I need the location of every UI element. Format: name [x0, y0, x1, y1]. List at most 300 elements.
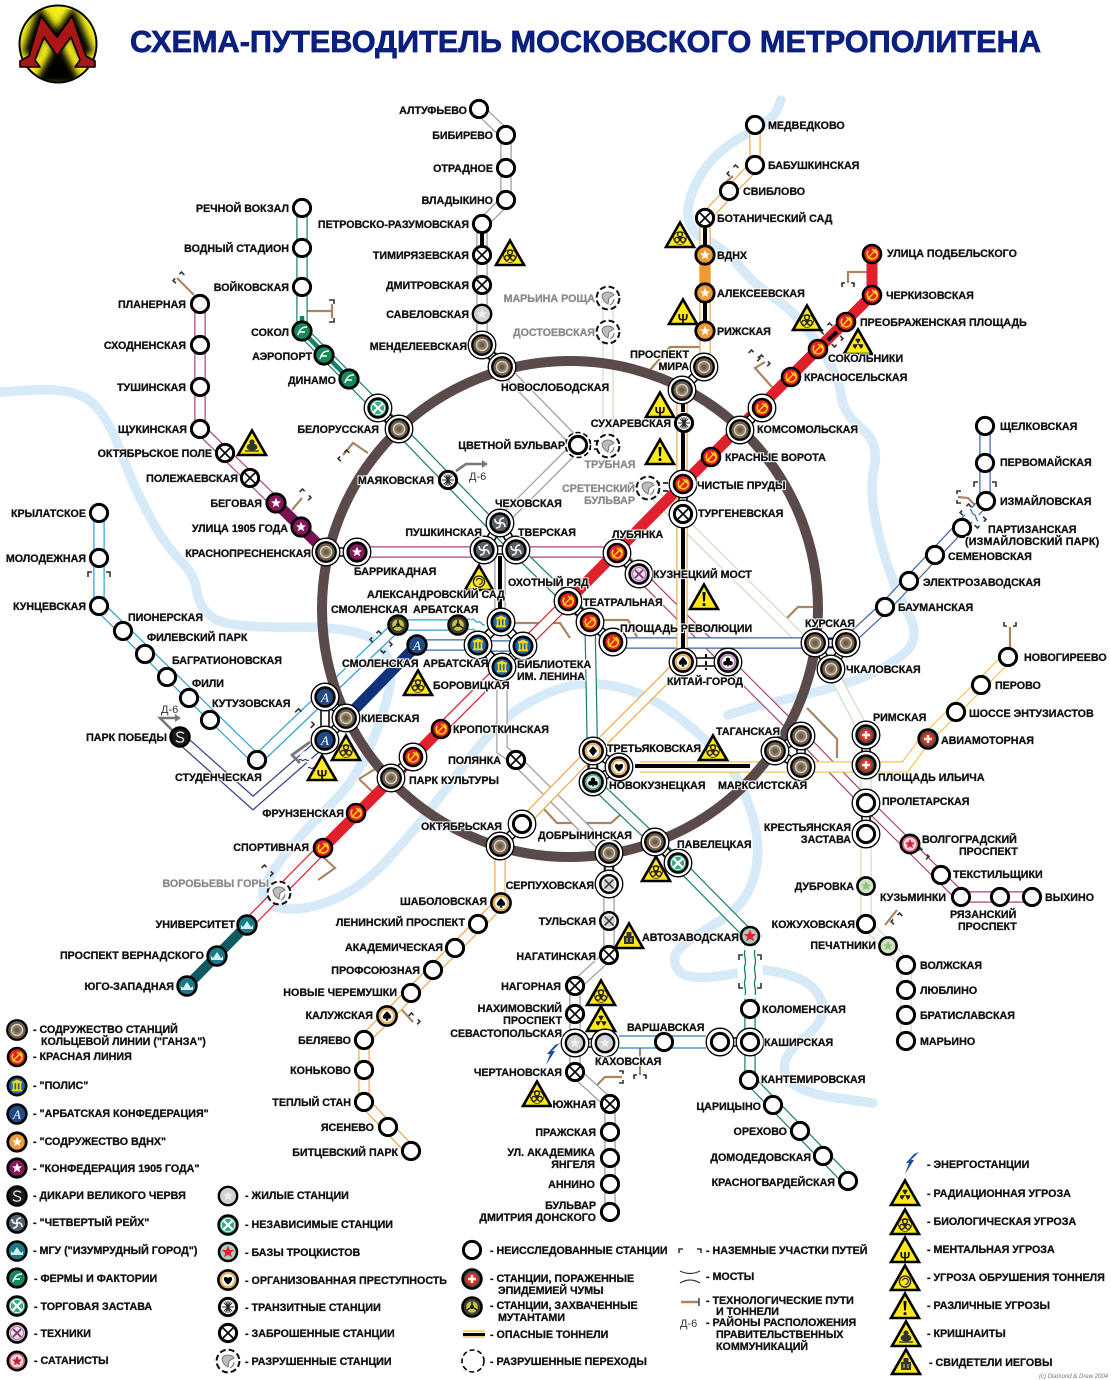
station: Филевский парк: ФИЛЕВСКИЙ ПАРК	[147, 631, 248, 644]
station: Волжская	[897, 956, 982, 974]
station: Полянка: ПОЛЯНКА	[448, 755, 501, 767]
station: ВДНХ: ВДНХ	[717, 250, 748, 262]
station: Площадь Ильича	[852, 751, 985, 784]
station: Лубянка	[603, 529, 663, 567]
legend item: Дикари: - ДИКАРИ ВЕЛИКОГО ЧЕРВЯ	[33, 1190, 186, 1202]
legend item: Содружество ВДНХ: - "СОДРУЖЕСТВО ВДНХ"	[33, 1136, 166, 1148]
legend item: Разрушенные переходы	[462, 1350, 647, 1372]
legend item: Ганза	[7, 1020, 206, 1048]
station: Щелковская: ЩЕЛКОВСКАЯ	[1000, 421, 1077, 433]
legend item: Районы Д-6: Д-6	[680, 1318, 697, 1330]
station: Первомайская	[976, 454, 1092, 472]
legend item: Неисследованные	[463, 1241, 668, 1259]
station: Воробьевы горы	[162, 878, 290, 904]
station: Калужская	[305, 1006, 397, 1026]
legend item: Полис: - "ПОЛИС"	[33, 1080, 88, 1092]
station: Домодедовская	[710, 1147, 832, 1165]
station: Шоссе Энтузиастов: ШОССЕ ЭНТУЗИАСТОВ	[969, 708, 1094, 720]
station: Варшавская	[627, 1022, 704, 1051]
station: Профсоюзная	[331, 961, 442, 979]
station: Тверская	[502, 527, 576, 564]
station: Рязанский проспект: ПРОСПЕКТ	[958, 921, 1017, 933]
station: Охотный ряд	[508, 576, 589, 615]
station: Алексеевская: АЛЕКСЕЕВСКАЯ	[717, 288, 805, 300]
legend item: МГУ: - МГУ ("ИЗУМРУДНЫЙ ГОРОД")	[33, 1244, 198, 1257]
station: Нагорная	[501, 977, 584, 995]
station: Пионерская: ПИОНЕРСКАЯ	[128, 612, 203, 624]
legend item: Радиационная угроза: - РАДИАЦИОННАЯ УГРОЗА	[927, 1188, 1071, 1200]
station: Фили: ФИЛИ	[192, 678, 224, 690]
legend item: Ганза: - СОДРУЖЕСТВО СТАНЦИЙ	[33, 1023, 178, 1036]
station: Водный стадион: ВОДНЫЙ СТАДИОН	[184, 242, 289, 255]
station: Люблино: ЛЮБЛИНО	[920, 985, 977, 997]
station: Баррикадная: БАРРИКАДНАЯ	[354, 566, 436, 578]
station: Китай-город (пики)	[667, 648, 743, 688]
icon: mental threats: Ψ	[655, 404, 665, 419]
legend: infrastructure	[679, 1244, 867, 1353]
station: Смоленская	[342, 636, 426, 670]
arrow: D-6 near Mayakovskaya	[456, 460, 488, 483]
station: Преображенская площадь: ПРЕОБРАЖЕНСКАЯ ПЛОЩАДЬ	[860, 317, 1027, 329]
station: Новослободская	[488, 353, 609, 394]
station: Чеховская	[486, 498, 562, 537]
legend item: Энергостанции: - ЭНЕРГОСТАНЦИИ	[927, 1159, 1029, 1171]
station: Пушкинская	[405, 527, 498, 564]
station: Арбатская: АРБАТСКАЯ	[423, 658, 488, 670]
station: Ленинский проспект: ЛЕНИНСКИЙ ПРОСПЕКТ	[336, 916, 465, 929]
station: Киевская	[311, 683, 419, 754]
legend: station types	[217, 1187, 447, 1372]
station: Аэропорт	[252, 346, 333, 364]
legend item: Кришнаиты	[892, 1322, 1006, 1346]
station: Проспект Мира: ПРОСПЕКТ	[630, 349, 689, 361]
station: Рязанский проспект: РЯЗАНСКИЙ	[950, 908, 1016, 921]
legend item: Организованная преступность: - ОРГАНИЗОВАННАЯ ПРЕСТУПНОСТЬ	[245, 1275, 447, 1287]
station: Киевская: A	[320, 733, 329, 748]
station: Печатники: ПЕЧАТНИКИ	[810, 940, 876, 952]
legend item: Мутанты	[462, 1297, 638, 1324]
legend item: Транзитные станции: - ТРАНЗИТНЫЕ СТАНЦИИ	[245, 1302, 381, 1314]
station: Крылатское	[11, 504, 108, 522]
station: Каховская: КАХОВСКАЯ	[595, 1056, 661, 1068]
station: Площадь Революции	[599, 623, 752, 656]
legend item: Угроза обрушения тоннеля	[891, 1266, 1105, 1290]
station: Братиславская: БРАТИСЛАВСКАЯ	[920, 1010, 1015, 1022]
station: Перово	[972, 676, 1041, 694]
station: Выхино: ВЫХИНО	[1045, 892, 1094, 904]
station: Сухаревская: СУХАРЕВСКАЯ	[591, 418, 671, 430]
rivers	[0, 100, 914, 1103]
line: grey Serpukhovskaya	[479, 109, 610, 1212]
station: Каховская	[591, 1029, 661, 1068]
station: Новогиреево	[999, 648, 1107, 666]
station: Нахимовский проспект: ПРОСПЕКТ	[503, 1015, 562, 1027]
station: Кузнецкий мост: КУЗНЕЦКИЙ МОСТ	[653, 568, 752, 581]
station: Автозаводская: АВТОЗАВОДСКАЯ	[642, 932, 739, 944]
station: Авиамоторная: АВИАМОТОРНАЯ	[941, 735, 1034, 747]
station: Театральная: ТЕАТРАЛЬНАЯ	[583, 597, 663, 609]
station: Партизанская	[953, 519, 1100, 548]
station: Юго-Западная: ЮГО-ЗАПАДНАЯ	[84, 981, 174, 993]
station: Электрозаводская	[900, 572, 1041, 590]
station: Дмитровская	[386, 276, 491, 294]
station: Алтуфьево	[399, 100, 488, 118]
station: Коломенская	[741, 1000, 846, 1018]
station: Бульвар Дмитрия Донского: ДМИТРИЯ ДОНСКОГО	[479, 1212, 596, 1224]
line: light blue Filyovskaya	[99, 513, 501, 760]
station: Новогиреево: НОВОГИРЕЕВО	[1024, 652, 1107, 664]
station: Ул. Академика Янгеля	[507, 1147, 619, 1171]
station: Студенческая	[175, 751, 266, 784]
station: Щелковская	[976, 417, 1077, 435]
station: Коньково: КОНЬКОВО	[290, 1065, 351, 1077]
station: Александровский сад	[367, 588, 515, 636]
station: Пражская: ПРАЖСКАЯ	[535, 1127, 596, 1139]
icon: energy station	[546, 1043, 560, 1065]
legend item: Фермы	[8, 1269, 157, 1287]
station: Савеловская	[386, 305, 491, 323]
station: Сокол: СОКОЛ	[251, 327, 289, 339]
legend item: Неисследованные: - НЕИССЛЕДОВАННЫЕ СТАНЦИИ	[490, 1245, 668, 1257]
legend item: Дикари	[8, 1187, 186, 1205]
station: Таганская	[716, 722, 815, 765]
station: Кузьминки: КУЗЬМИНКИ	[880, 892, 946, 904]
legend item: Биологическая угроза	[891, 1210, 1076, 1234]
station: Сретенский бульвар: БУЛЬВАР	[584, 495, 635, 507]
station: Кропоткинская: КРОПОТКИНСКАЯ	[453, 724, 549, 736]
legend: station states	[462, 1241, 668, 1372]
legend item: Мутанты: МУТАНТАМИ	[498, 1312, 565, 1324]
legend item: Красная линия: - КРАСНАЯ ЛИНИЯ	[33, 1051, 132, 1063]
station: Ул. Академика Янгеля: ЯНГЕЛЯ	[551, 1159, 595, 1171]
station: Павелецкая	[641, 828, 752, 877]
station: Планерная	[118, 295, 209, 313]
station: Варшавская: ВАРШАВСКАЯ	[627, 1022, 704, 1034]
station: Авиамоторная	[919, 730, 1034, 748]
station: Краснопресненская	[185, 538, 340, 566]
station: Краснопресненская: КРАСНОПРЕСНЕНСКАЯ	[185, 548, 311, 560]
station: Библиотека им. Ленина: ИМ. ЛЕНИНА	[517, 671, 585, 683]
station: Чеховская: ЧЕХОВСКАЯ	[495, 498, 562, 510]
station: Нагатинская	[516, 946, 618, 964]
legend item: Жилые станции: - ЖИЛЫЕ СТАНЦИИ	[245, 1190, 349, 1202]
arrow: D-6 near Park Pobedy	[160, 704, 181, 730]
station: Арбатская Филёвской линии: АРБАТСКАЯ	[413, 604, 478, 616]
station: Речной вокзал	[196, 199, 311, 217]
station: Университет	[156, 916, 256, 934]
station: Каширская (Каховская линия)	[706, 1028, 734, 1056]
station: Октябрьское поле: ОКТЯБРЬСКОЕ ПОЛЕ	[98, 448, 212, 460]
station: Александровский сад: АЛЕКСАНДРОВСКИЙ САД	[367, 588, 505, 601]
station: Орехово	[734, 1122, 809, 1140]
station: Владыкино: ВЛАДЫКИНО	[422, 195, 493, 207]
legend item: Энергостанции	[905, 1152, 1029, 1174]
station: Севастопольская: СЕВАСТОПОЛЬСКАЯ	[450, 1028, 562, 1040]
station: Киевская: A	[320, 690, 329, 705]
line: Kakhovskaya link	[619, 1036, 706, 1048]
station: Пушкинская: ПУШКИНСКАЯ	[405, 527, 482, 539]
legend item: Биологическая угроза: - БИОЛОГИЧЕСКАЯ УГРОЗА	[927, 1216, 1076, 1228]
line: orange Kaluzhsko-Rizhskaya	[364, 125, 755, 1151]
station: Петровско-Разумовская: ПЕТРОВСКО-РАЗУМОВСКАЯ	[318, 219, 469, 231]
station: Кропоткинская	[432, 720, 549, 738]
legend item: Технологические пути: - ТЕХНОЛОГИЧЕСКИЕ ПУТИ	[706, 1295, 854, 1307]
legend item: Техники	[8, 1324, 91, 1342]
station: Автозаводская	[642, 927, 759, 945]
legend item: Техники: - ТЕХНИКИ	[34, 1328, 91, 1340]
legend item: Независимые станции: - НЕЗАВИСИМЫЕ СТАНЦИИ	[245, 1219, 393, 1231]
station: Южная	[552, 1095, 619, 1113]
station: Чертановская: ЧЕРТАНОВСКАЯ	[474, 1067, 562, 1079]
legend item: Радиационная угроза	[891, 1180, 1071, 1205]
station: Рижская	[696, 322, 771, 340]
station: Домодедовская: ДОМОДЕДОВСКАЯ	[710, 1152, 811, 1164]
legend item: Свидетели Иеговы	[892, 1350, 1052, 1374]
station: Площадь Ильича: ПЛОЩАДЬ ИЛЬИЧА	[878, 772, 985, 784]
station: Бибирево	[432, 126, 515, 144]
station: Улица 1905 года	[192, 518, 310, 536]
station: Первомайская: ПЕРВОМАЙСКАЯ	[1000, 456, 1092, 469]
station: Багратионовская	[158, 655, 282, 686]
station: Ясенево	[321, 1118, 397, 1136]
station: Римская	[852, 712, 926, 749]
station: Университет: УНИВЕРСИТЕТ	[156, 919, 235, 931]
station: Владыкино	[422, 191, 515, 209]
station: Цветной бульвар	[458, 432, 590, 458]
station: Бауманская	[876, 598, 973, 616]
legend item: Конфедерация 1905 года: - "КОНФЕДЕРАЦИЯ 1905 ГОДА"	[33, 1163, 199, 1175]
legend item: Технологические пути	[681, 1295, 854, 1318]
station: Волгоградский проспект	[901, 833, 1018, 858]
station: Крестьянская застава: КРЕСТЬЯНСКАЯ	[764, 822, 851, 834]
station: Сходненская	[104, 336, 209, 354]
station: Рязанский проспект	[950, 888, 1017, 933]
station: Свиблово	[720, 182, 805, 200]
line: green Zamoskvoretskaya	[302, 208, 848, 1181]
station: Тверская: ТВЕРСКАЯ	[518, 527, 576, 539]
station: Нагатинская: НАГАТИНСКАЯ	[516, 951, 596, 963]
station: Кожуховская: КОЖУХОВСКАЯ	[772, 919, 855, 931]
legend item: Фермы: - ФЕРМЫ И ФАКТОРИИ	[34, 1273, 157, 1285]
station: Бауманская: БАУМАНСКАЯ	[898, 602, 973, 614]
station: Сокольники: СОКОЛЬНИКИ	[828, 353, 903, 365]
station: Проспект Вернадского: ПРОСПЕКТ ВЕРНАДСКОГО	[60, 950, 204, 962]
station: Бульвар Дмитрия Донского: БУЛЬВАР	[545, 1200, 596, 1212]
legend item: Транзитные станции	[219, 1298, 381, 1316]
legend item: Заброшенные станции: - ЗАБРОШЕННЫЕ СТАНЦИИ	[245, 1328, 395, 1340]
station: Новые Черемушки	[283, 984, 420, 1002]
legend item: Четвертый Рейх: - "ЧЕТВЕРТЫЙ РЕЙХ"	[33, 1216, 149, 1229]
legend item: Опасные тоннели: - ОПАСНЫЕ ТОННЕЛИ	[490, 1329, 608, 1341]
station: Крестьянская застава	[764, 820, 880, 848]
station: Войковская	[214, 278, 311, 296]
station: Белорусская	[297, 394, 413, 443]
station: Братиславская	[897, 1006, 1015, 1024]
legend item: Базы троцкистов: - БАЗЫ ТРОЦКИСТОВ	[245, 1247, 361, 1259]
station: Аннино	[548, 1175, 619, 1193]
station: Проспект Мира: МИРА	[658, 361, 689, 373]
station: Чистые пруды	[669, 470, 786, 498]
technical tunnels	[177, 176, 1010, 1085]
station: Улица 1905 года: УЛИЦА 1905 ГОДА	[192, 523, 288, 535]
station: Кутузовская: КУТУЗОВСКАЯ	[212, 698, 290, 710]
line: yellow Kalininskaya	[635, 657, 1008, 767]
station: Проспект Мира	[630, 349, 718, 404]
legend item: Организованная преступность	[218, 1270, 447, 1290]
station: Текстильщики	[932, 866, 1043, 884]
station: Третьяковская: ТРЕТЬЯКОВСКАЯ	[607, 743, 701, 755]
station: Новокузнецкая: НОВОКУЗНЕЦКАЯ	[609, 780, 706, 792]
station: Улица Подбельского	[863, 245, 1017, 263]
station: Добрынинская: ДОБРЫНИНСКАЯ	[538, 830, 632, 842]
legend item: Сатанисты	[8, 1352, 109, 1370]
station: Красногвардейская	[712, 1172, 857, 1190]
station: Семеновская: СЕМЕНОВСКАЯ	[948, 551, 1032, 563]
station: Крестьянская застава: ЗАСТАВА	[801, 834, 851, 846]
legend item: Ганза: КОЛЬЦЕВОЙ ЛИНИИ ("ГАНЗА")	[41, 1035, 206, 1048]
station: Аннино: АННИНО	[548, 1179, 595, 1191]
station: Академическая	[345, 939, 464, 957]
legend item: Угроза обрушения тоннеля: - УГРОЗА ОБРУШЕНИЯ ТОННЕЛЯ	[927, 1272, 1105, 1284]
station: Кунцевская	[13, 597, 108, 615]
station: Фрунзенская: ФРУНЗЕНСКАЯ	[262, 808, 344, 820]
station: Сретенский бульвар	[562, 477, 659, 507]
station: Планерная: ПЛАНЕРНАЯ	[118, 299, 186, 311]
station: Кутузовская	[201, 698, 290, 729]
station: Серпуховская	[506, 870, 623, 898]
copyright: (c) Diamond & Drew 2004	[1039, 1374, 1109, 1380]
grey bracket near Kievskaya	[292, 742, 310, 763]
surface sections and bridges	[88, 165, 1016, 1083]
station: Выхино	[1023, 888, 1094, 906]
station: Коньково	[290, 1061, 373, 1079]
station: Юго-Западная	[84, 977, 196, 995]
legend item: МГУ	[8, 1242, 198, 1260]
station: Площадь Революции: ПЛОЩАДЬ РЕВОЛЮЦИИ	[620, 623, 752, 635]
station: Шаболовская	[400, 893, 511, 913]
station: Дубровка	[795, 877, 875, 895]
station: Парк Победы	[86, 728, 189, 746]
station: Третьяковская (Калининская)	[605, 753, 633, 781]
station: Маяковская	[358, 471, 457, 489]
station: Битцевский парк: БИТЦЕВСКИЙ ПАРК	[292, 1146, 398, 1159]
icon: other threats	[238, 430, 718, 948]
station: Семеновская	[926, 546, 1032, 564]
station: Улица Подбельского: УЛИЦА ПОДБЕЛЬСКОГО	[887, 248, 1017, 260]
icon: mental threats: Ψ	[678, 311, 688, 326]
station: Бабушкинская: БАБУШКИНСКАЯ	[768, 160, 859, 172]
icon: metro logo	[20, 6, 96, 84]
legend item: Ментальная угроза: Ψ	[900, 1249, 910, 1264]
station: Битцевский парк	[292, 1142, 420, 1160]
station: Ботанический сад	[696, 209, 833, 227]
legend item: Районы Д-6: - РАЙОНЫ РАСПОЛОЖЕНИЯ	[706, 1316, 856, 1329]
legend item: Различные угрозы: - РАЗЛИЧНЫЕ УГРОЗЫ	[927, 1300, 1050, 1312]
station: Дмитровская: ДМИТРОВСКАЯ	[386, 280, 469, 292]
interchanges	[325, 345, 866, 1043]
station: Молодежная	[6, 549, 108, 567]
legend item: Торговая застава: - ТОРГОВАЯ ЗАСТАВА	[34, 1301, 152, 1313]
station: Марьино	[897, 1032, 975, 1050]
station: Савеловская: САВЕЛОВСКАЯ	[386, 309, 469, 321]
station: Молодежная: МОЛОДЕЖНАЯ	[6, 553, 86, 565]
arrow: D-6 near Park Pobedy: Д-6	[161, 704, 178, 716]
station: Менделеевская	[370, 331, 496, 359]
station: Люблино	[897, 981, 977, 999]
station: Тургеневская: ТУРГЕНЕВСКАЯ	[698, 508, 783, 520]
station: Сокольники	[809, 340, 903, 365]
station: Таганская: ТАГАНСКАЯ	[716, 726, 780, 738]
station: Охотный ряд: ОХОТНЫЙ РЯД	[508, 576, 589, 589]
legend item: Мутанты: - СТАНЦИИ, ЗАХВАЧЕННЫЕ	[490, 1300, 638, 1312]
station: Кантемировская: КАНТЕМИРОВСКАЯ	[761, 1074, 865, 1086]
station: Смоленская Филёвской линии	[331, 604, 408, 635]
legend item: Разрушенные переходы: - РАЗРУШЕННЫЕ ПЕРЕХОДЫ	[490, 1356, 647, 1368]
station: Тургеневская	[669, 500, 783, 528]
legend item: Полис	[8, 1077, 88, 1095]
station: Пролетарская	[852, 789, 969, 817]
station: Марксистская: МАРКСИСТСКАЯ	[718, 780, 807, 792]
station: Достоевская	[513, 321, 619, 343]
station: Динамо: ДИНАМО	[288, 375, 336, 387]
station: ВДНХ	[696, 246, 748, 264]
station: Фили	[180, 678, 224, 707]
legend item: Содружество ВДНХ	[8, 1133, 166, 1151]
station: Алтуфьево: АЛТУФЬЕВО	[399, 105, 467, 117]
station: Измайловская: ИЗМАЙЛОВСКАЯ	[1000, 495, 1091, 508]
legend item: Ментальная угроза	[891, 1238, 1055, 1264]
station: Печатники	[810, 937, 897, 955]
station: Шаболовская: ШАБОЛОВСКАЯ	[400, 896, 487, 908]
station: Октябрьская: ОКТЯБРЬСКАЯ	[421, 821, 502, 833]
station: Царицыно	[696, 1096, 782, 1114]
station: Кожуховская	[772, 915, 875, 933]
station: Медведково: МЕДВЕДКОВО	[768, 120, 845, 132]
station: Филевский парк	[136, 631, 248, 663]
station: Третьяковская	[579, 737, 701, 765]
station: Новокузнецкая	[579, 768, 706, 796]
legend item: Красная линия	[8, 1048, 132, 1066]
station: Орехово: ОРЕХОВО	[734, 1126, 787, 1138]
title: СХЕМА-ПУТЕВОДИТЕЛЬ МОСКОВСКОГО МЕТРОПОЛИТЕНА	[130, 25, 1041, 59]
legend item: Разрушенные станции	[217, 1350, 392, 1372]
station: Калужская: КАЛУЖСКАЯ	[305, 1010, 373, 1022]
legend item: Кришнаиты: - КРИШНАИТЫ	[927, 1328, 1006, 1340]
station: Тульская: ТУЛЬСКАЯ	[539, 916, 596, 928]
station: Волжская: ВОЛЖСКАЯ	[920, 960, 982, 972]
station: Каширская	[736, 1028, 833, 1056]
legend item: Наземные участки: - НАЗЕМНЫЕ УЧАСТКИ ПУТЕЙ	[706, 1244, 867, 1257]
station: Киевская: КИЕВСКАЯ	[361, 713, 419, 725]
station: Марьина Роща: МАРЬИНА РОЩА	[504, 293, 595, 305]
station: Дубровка: ДУБРОВКА	[795, 881, 854, 893]
station: Трубная	[585, 435, 635, 471]
station: Новые Черемушки: НОВЫЕ ЧЕРЕМУШКИ	[283, 987, 397, 999]
station: Теплый Стан	[272, 1093, 373, 1111]
line: light green Lublinskaya	[608, 298, 906, 1041]
station: Аэропорт: АЭРОПОРТ	[252, 351, 312, 363]
station: Каширская: КАШИРСКАЯ	[764, 1037, 833, 1049]
station: Красногвардейская: КРАСНОГВАРДЕЙСКАЯ	[712, 1176, 835, 1189]
station: Кунцевская: КУНЦЕВСКАЯ	[13, 601, 86, 613]
station: Чкаловская: ЧКАЛОВСКАЯ	[846, 664, 921, 676]
station: Крылатское: КРЫЛАТСКОЕ	[11, 508, 86, 520]
legend item: Чума	[463, 1270, 634, 1297]
station: Пролетарская: ПРОЛЕТАРСКАЯ	[882, 796, 969, 808]
station: Коломенская: КОЛОМЕНСКАЯ	[762, 1004, 846, 1016]
station: Парк Победы: ПАРК ПОБЕДЫ	[86, 732, 167, 744]
station: Китай-город (пики): КИТАЙ-ГОРОД	[667, 675, 743, 688]
